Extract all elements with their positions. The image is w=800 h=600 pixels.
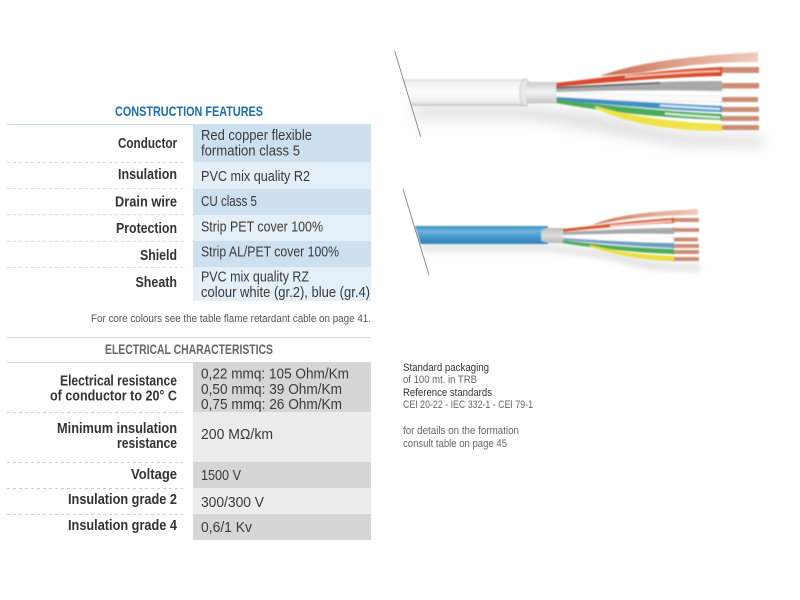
row values: construction: colour white (gr.2), blue (gr.4) [201,285,370,301]
text block: packaging and standards: Standard packaging [403,362,489,374]
row labels: electrical: Minimum insulation [57,421,177,437]
row values: construction: Strip AL/PET cover 100% [201,244,339,260]
row values: construction: CU class 5 [201,194,257,210]
coloured core wires [562,218,674,261]
row values: construction: Strip PET cover 100% [201,220,323,236]
row labels: construction: Sheath [136,275,177,291]
text block: packaging and standards: of 100 mt. in TRB [403,374,477,386]
heading: electrical characteristics: ELECTRICAL CHARACTERISTICS [105,341,273,357]
outer sheath [403,79,527,106]
text block: packaging and standards [403,362,533,450]
row values: construction: PVC mix quality RZ [201,270,309,286]
footnote: core colours: For core colours see the table flame retardant cable on page 41. [91,313,371,325]
foil shield [523,82,556,103]
row labels: electrical: Electrical resistance [60,374,177,390]
copper conductor ends [721,67,759,130]
row values: electrical: 1500 V [201,468,241,484]
row labels: construction [115,136,177,291]
panel: electrical characteristics [7,338,371,540]
row values: electrical [201,366,349,536]
cut line [395,51,421,137]
row labels: electrical: Insulation grade 4 [68,518,177,534]
coloured core wires [554,67,722,131]
row labels: construction: Protection [116,221,177,237]
row labels: electrical: resistance [117,436,177,452]
row labels: construction: Conductor [118,136,177,152]
row values: electrical: 300/300 V [201,495,264,511]
text block: packaging and standards: Reference standards [403,387,492,399]
text block: packaging and standards: consult table on page 45 [403,438,507,450]
copper fan [592,209,698,225]
cut line [403,189,429,275]
row values: construction: formation class 5 [201,144,300,160]
row values: electrical: 0,22 mmq: 105 Ohm/Km [201,366,349,382]
heading: construction features: CONSTRUCTION FEATURES [115,103,263,119]
cable shadow [421,244,700,272]
text block: packaging and standards: for details on the formation [403,425,519,437]
row labels: electrical: Insulation grade 2 [68,492,177,508]
illustration: white sheathed cable [395,51,762,148]
cable shadow [412,106,762,148]
foil shield [541,228,563,243]
row values: electrical: 200 MΩ/km [201,427,273,443]
illustration: blue sheathed cable [403,189,700,275]
row values: construction [201,128,370,301]
row values: electrical: 0,6/1 Kv [201,520,253,536]
row values: construction: Red copper flexible [201,128,312,144]
row labels: electrical: of conductor to 20° C [50,388,177,404]
row values: electrical: 0,75 mmq: 26 Ohm/Km [201,397,342,413]
copper fan [600,52,758,76]
row labels: construction: Insulation [118,167,177,183]
outer sheath [415,226,548,244]
row values: electrical: 0,50 mmq: 39 Ohm/Km [201,382,342,398]
row labels: construction: Drain wire [115,194,177,210]
row labels: electrical: Voltage [131,467,177,483]
value cell backgrounds [193,124,371,301]
row values: construction: PVC mix quality R2 [201,169,310,185]
row labels: construction: Shield [140,248,177,264]
value cell backgrounds: electrical [193,362,371,540]
row labels: electrical [50,374,177,534]
copper conductor ends [672,218,699,261]
text block: packaging and standards: CEI 20-22 - IEC 332-1 - CEI 79-1 [403,399,533,411]
panel: construction features [7,103,371,325]
